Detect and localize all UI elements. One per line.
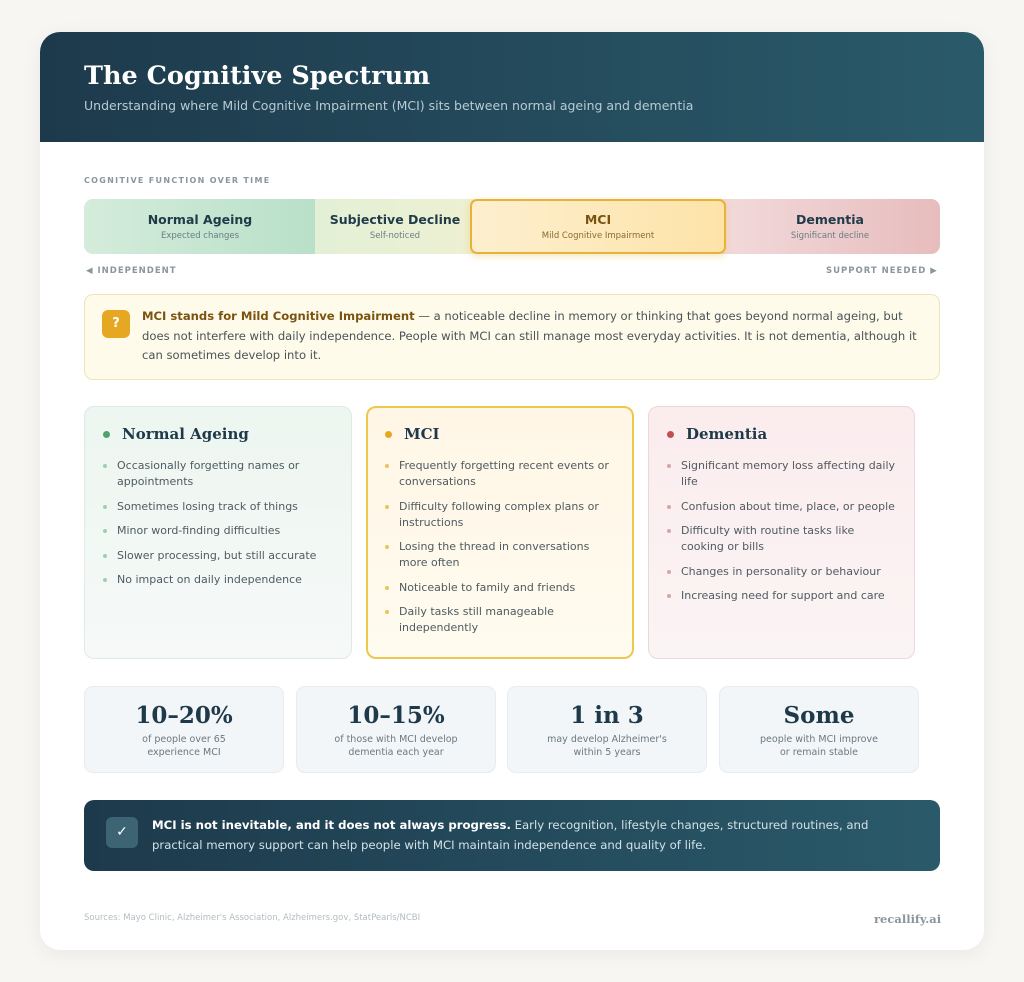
stat 3: 1 in 3 xyxy=(570,702,644,729)
stat 1: of people over 65 xyxy=(142,734,226,745)
list: Losing the thread in conversations more often xyxy=(399,540,589,569)
segment: MCI: MCI xyxy=(585,212,611,227)
stat 4 xyxy=(719,686,919,773)
segment: normal ageing: Normal Ageing xyxy=(148,212,252,227)
list: Confusion about time, place, or people xyxy=(681,500,895,512)
list xyxy=(667,459,895,602)
list: Frequently forgetting recent events or conversations xyxy=(399,459,609,488)
list: Minor word-finding difficulties xyxy=(117,524,280,537)
panel: dementia xyxy=(648,406,915,659)
segment: dementia: Dementia xyxy=(796,212,864,227)
stat 4: Some xyxy=(784,702,854,729)
heading: Normal Ageing xyxy=(122,425,249,443)
list: Noticeable to family and friends xyxy=(399,580,575,594)
stat 4: people with MCI improve xyxy=(760,734,878,745)
sources: Sources: Mayo Clinic, Alzheimer's Association, Alzheimers.gov, StatPearls/NCBI xyxy=(84,913,420,923)
banner xyxy=(84,800,940,871)
segment: dementia xyxy=(720,199,940,254)
list: Increasing need for support and care xyxy=(681,589,885,602)
axis label left: ◀ INDEPENDENT xyxy=(86,266,177,276)
spectrum bar xyxy=(84,196,940,260)
segment: normal ageing: Expected changes xyxy=(161,231,239,241)
stat 2: of those with MCI develop xyxy=(334,734,458,745)
header xyxy=(40,32,984,142)
subtitle: Understanding where Mild Cognitive Impairment (MCI) sits between normal ageing and dementia xyxy=(84,98,693,113)
panel: normal ageing xyxy=(84,406,352,659)
list: Occasionally forgetting names or appointments xyxy=(117,459,299,488)
list: Slower processing, but still accurate xyxy=(117,548,316,562)
icon: check: ✓ xyxy=(116,824,128,840)
list: Sometimes losing track of things xyxy=(117,500,298,512)
segment: MCI: Mild Cognitive Impairment xyxy=(542,231,654,241)
stat 2 xyxy=(296,686,496,773)
stat 2: dementia each year xyxy=(348,746,444,758)
segment: MCI xyxy=(470,199,726,254)
list: Difficulty following complex plans or instructions xyxy=(399,500,599,528)
definition callout xyxy=(84,294,940,380)
segment: subjective decline: Self-noticed xyxy=(370,231,420,241)
stat 4: or remain stable xyxy=(780,746,858,758)
icon: question xyxy=(102,310,130,338)
list: Difficulty with routine tasks like cooking or bills xyxy=(681,524,854,553)
list: Daily tasks still manageable independently xyxy=(399,605,554,634)
title: The Cognitive Spectrum xyxy=(84,61,430,91)
stat 3 xyxy=(507,686,707,773)
list: Significant memory loss affecting daily life xyxy=(681,459,895,488)
heading: MCI xyxy=(404,425,440,443)
banner text: MCI is not inevitable, and it does not always progress. Early recognition, lifestyle changes, structured routines, and practical memory support can help people with MCI maintain independence and quality of life. xyxy=(152,818,868,852)
segment: subjective decline: Subjective Decline xyxy=(330,212,460,227)
list xyxy=(103,459,316,586)
stat 2: 10–15% xyxy=(347,702,445,729)
icon: question: ? xyxy=(112,316,120,331)
stat 1 xyxy=(84,686,284,773)
stat 1: experience MCI xyxy=(147,746,221,758)
stat 3: within 5 years xyxy=(573,746,641,758)
panel: MCI xyxy=(366,406,634,659)
list xyxy=(385,459,609,634)
segment: subjective decline xyxy=(315,199,475,254)
list: Changes in personality or behaviour xyxy=(681,564,881,578)
brand: recallify.ai xyxy=(874,912,941,926)
list: No impact on daily independence xyxy=(117,573,302,586)
section label: COGNITIVE FUNCTION OVER TIME xyxy=(84,176,270,185)
heading: Dementia xyxy=(686,425,767,443)
stat 3: may develop Alzheimer's xyxy=(547,734,667,745)
stat 1: 10–20% xyxy=(135,702,233,729)
segment: dementia: Significant decline xyxy=(791,231,869,241)
icon: check xyxy=(106,817,138,848)
segment: normal ageing xyxy=(84,199,316,254)
heading xyxy=(385,425,440,443)
definition text: MCI stands for Mild Cognitive Impairment — a noticeable decline in memory or thinking that goes beyond normal ageing, but does not interfere with daily independence. People with MCI can still manage most everyday activities. It is not dementia, although it can sometimes develop into it. xyxy=(142,309,917,362)
axis label right: SUPPORT NEEDED ▶ xyxy=(826,266,938,276)
